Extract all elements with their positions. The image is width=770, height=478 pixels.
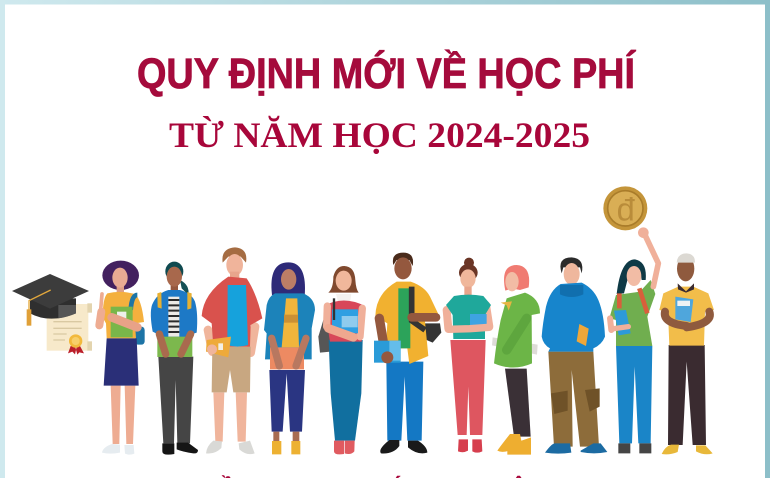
figure: student 5, brown hair and blue jeans [318, 266, 365, 454]
figure: student 6, yellow jacket and backpack [374, 253, 441, 453]
figure: student 1, yellow top and navy skirt [99, 261, 145, 455]
figure: student 11, white cap and yellow polo [659, 253, 714, 454]
icon: gold dong coin: đ [617, 191, 636, 228]
figure: student 2, blue jacket and striped shirt [151, 262, 198, 455]
clipped heading below the illustration [220, 475, 527, 478]
figure: student 7, teal top and pink trousers [446, 258, 491, 453]
figure: student 8, pink bob and green hoodie [492, 265, 540, 455]
icon: gold dong coin [603, 186, 647, 230]
subtitle: TỪ NĂM HỌC 2024-2025 [169, 115, 590, 155]
title: QUY ĐỊNH MỚI VỀ HỌC PHÍ [137, 49, 636, 98]
figure: student 9, blue puffer jacket [542, 257, 607, 454]
figure: student 4, curly hair and teal jacket [264, 262, 315, 454]
figure: student 10, raised arm and green shirt [609, 227, 658, 453]
icon: graduation cap and diploma [12, 274, 92, 355]
figure: student 3, red shirt and beige shorts [202, 247, 262, 454]
